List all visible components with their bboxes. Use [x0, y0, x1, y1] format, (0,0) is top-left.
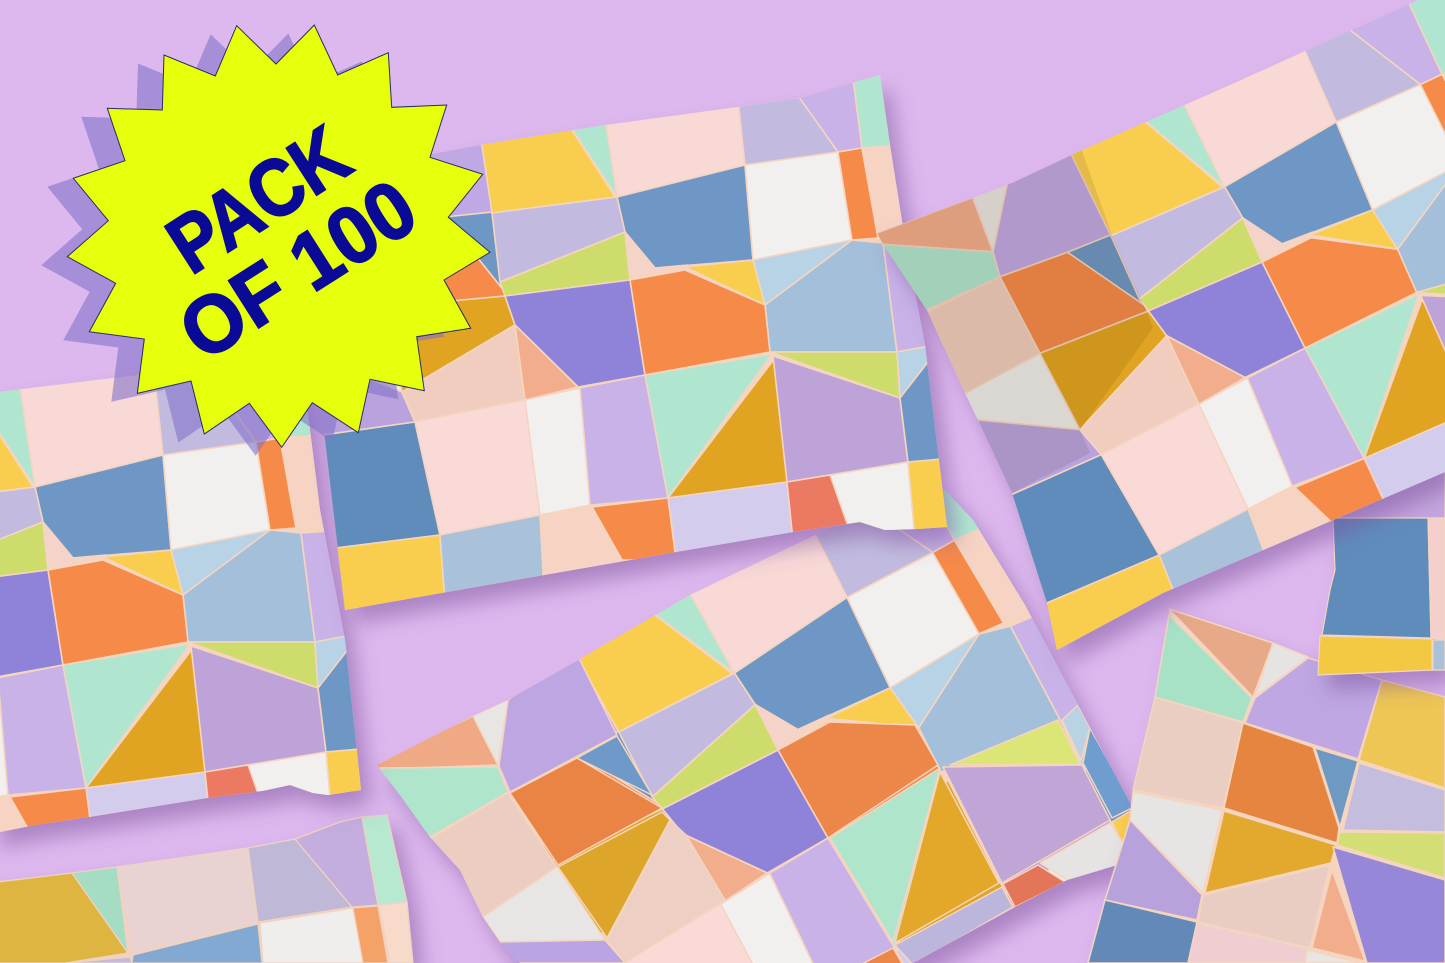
badge text line 2: OF 100 — [164, 163, 432, 378]
mailer: top right — [877, 0, 1445, 668]
starburst shadow — [41, 34, 464, 456]
badge text line 1: PACK — [152, 109, 366, 291]
mailer: top centre — [322, 75, 967, 632]
starburst badge: pack of 100 — [67, 25, 490, 447]
mailer: left — [0, 375, 380, 855]
flap and lower right cells of bottom centre mailer — [360, 650, 1134, 963]
mailer: bottom centre — [377, 490, 1134, 963]
mailer: right middle — [1318, 465, 1445, 675]
mailer: bottom left — [0, 815, 413, 963]
mailer: bottom right — [1088, 609, 1445, 963]
